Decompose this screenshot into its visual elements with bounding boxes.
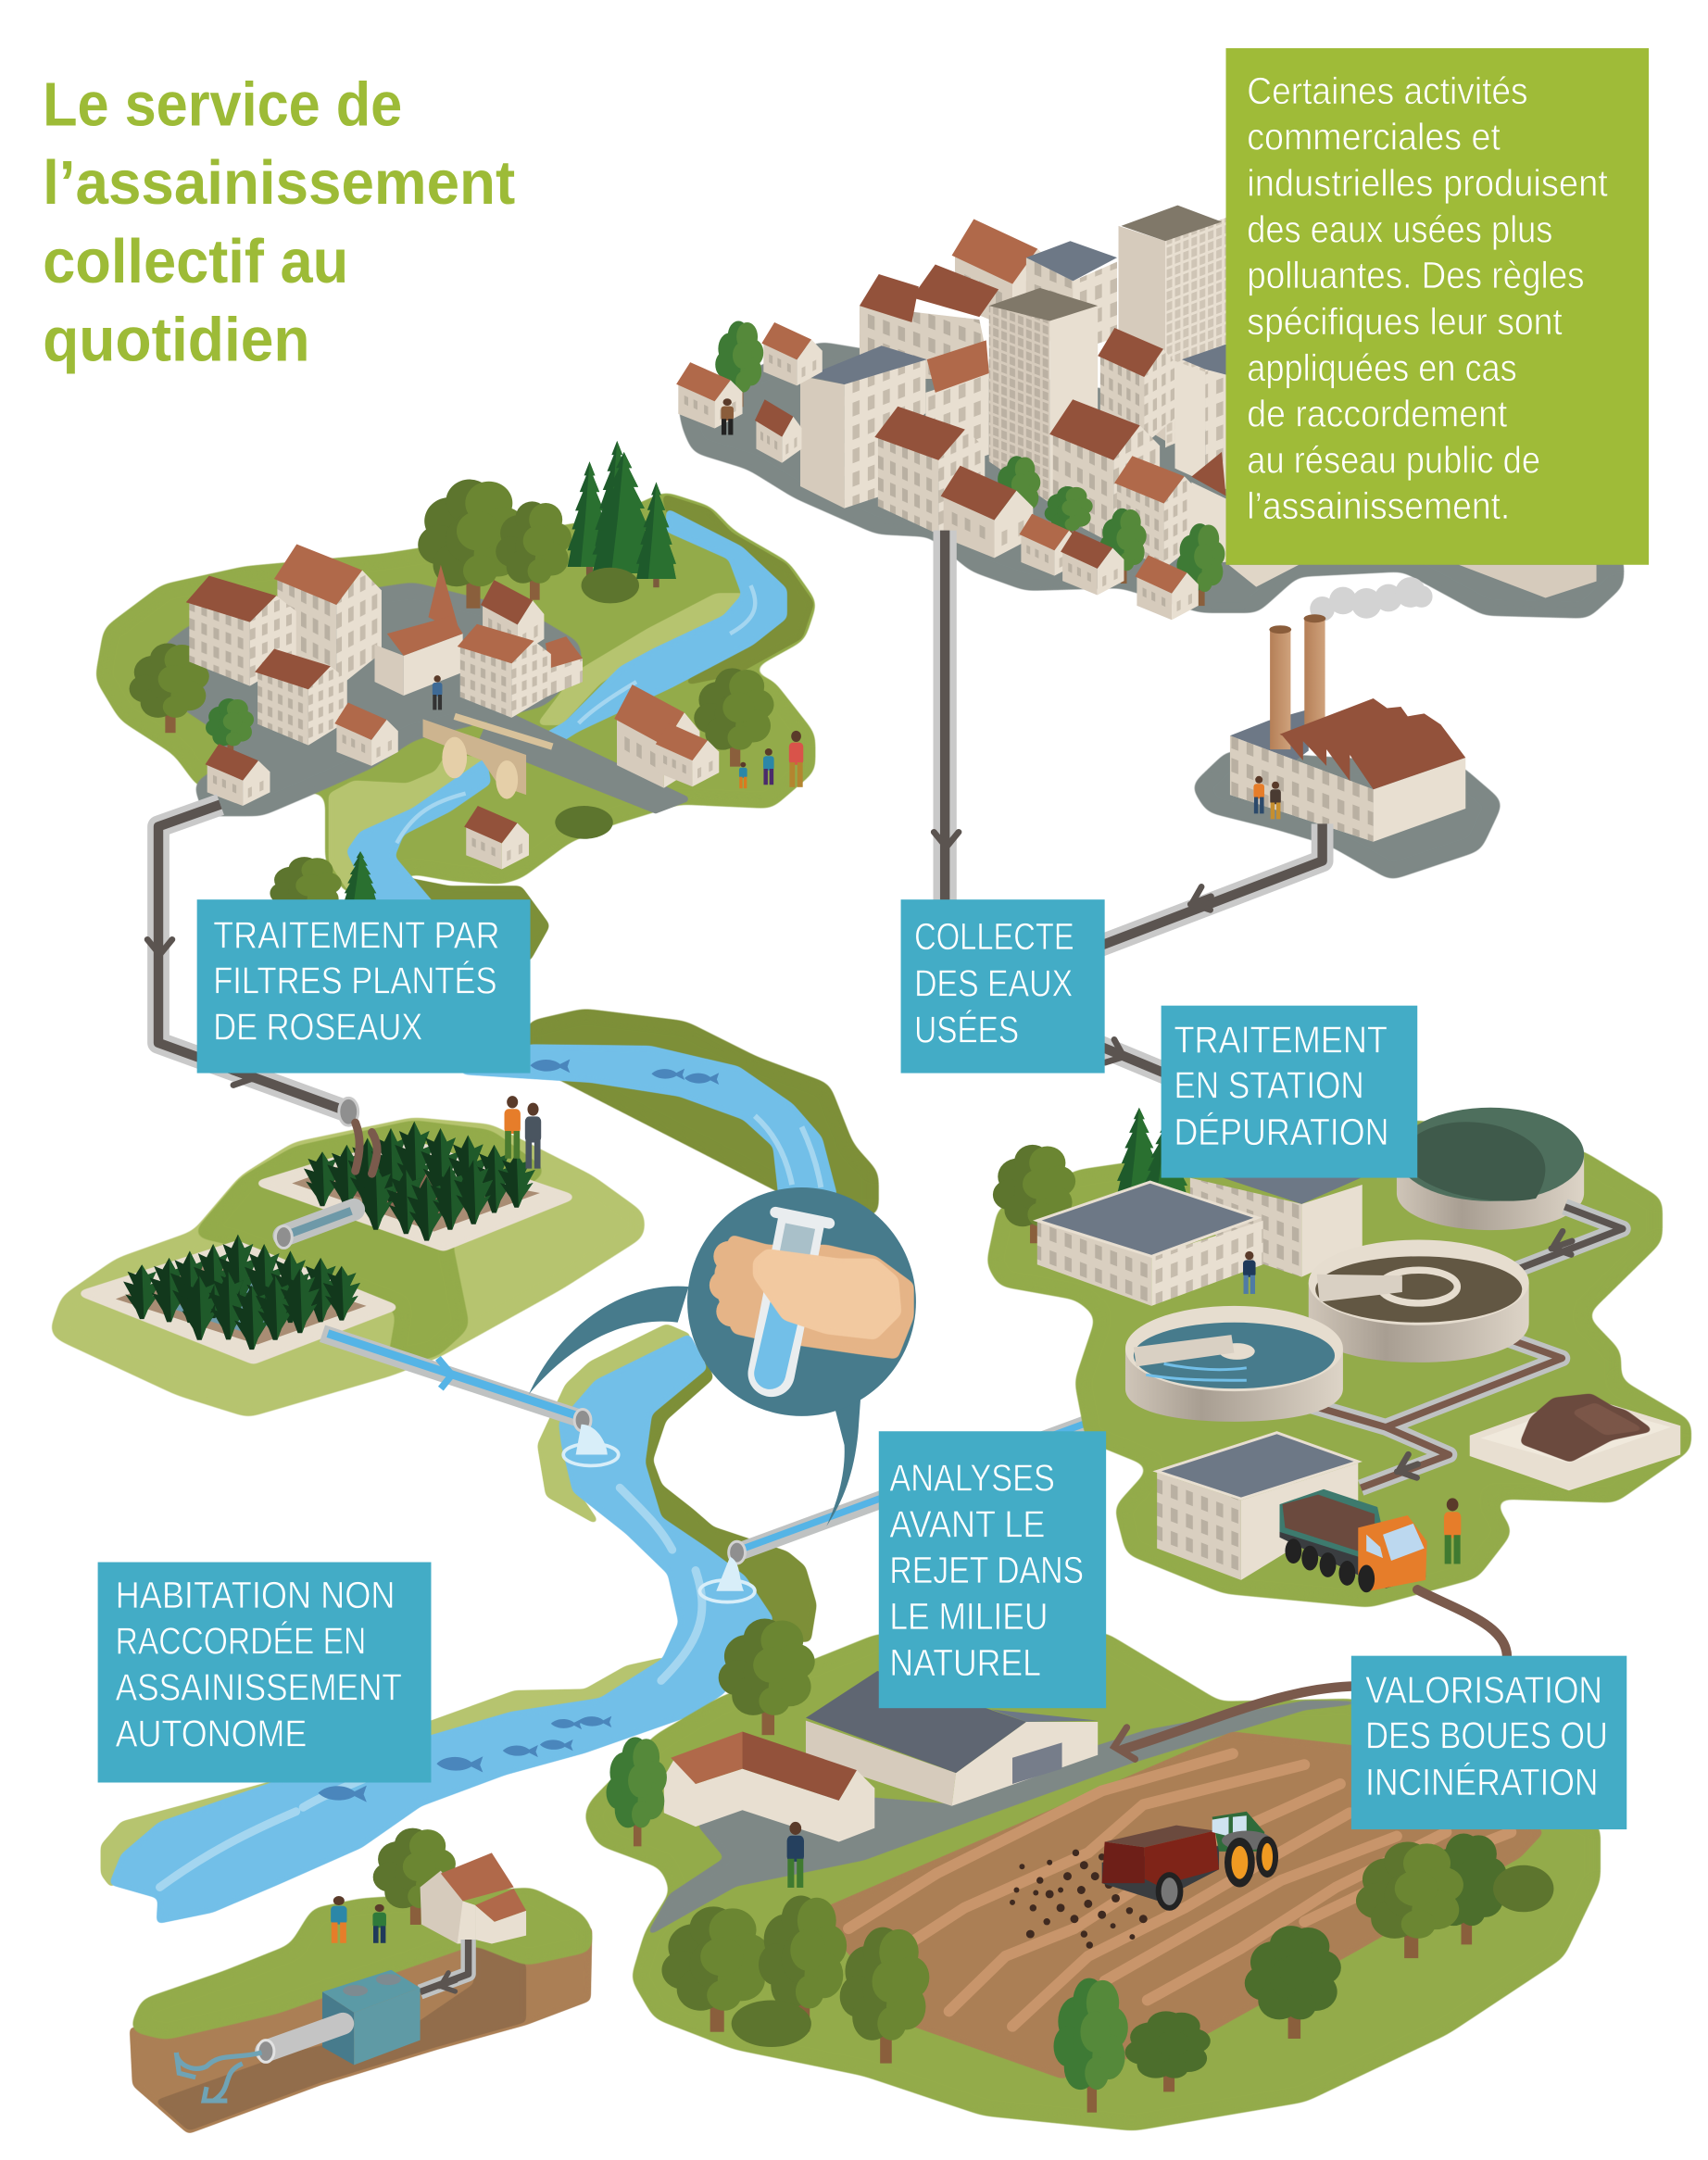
worker xyxy=(1444,1498,1461,1563)
label: reed bed treatment: TRAITEMENT PAR xyxy=(213,914,500,957)
callout: industrial wastewater: industrielles produisent xyxy=(1247,161,1608,204)
water outfall xyxy=(699,1557,755,1602)
furrows xyxy=(848,1753,1511,2027)
label: on-site sanitation: AUTONOME xyxy=(116,1712,307,1754)
river: lower stretch with banks xyxy=(104,1326,814,1922)
lower bed xyxy=(82,1244,394,1361)
label: treatment plant: TRAITEMENT xyxy=(1174,1019,1388,1061)
illustration: farm and field xyxy=(588,1619,1597,2127)
large barn xyxy=(806,1671,1098,1806)
pipe: factory to collection xyxy=(1095,823,1323,948)
children xyxy=(331,1896,386,1943)
septic tank xyxy=(322,1970,421,2065)
smoke xyxy=(1310,577,1433,622)
callout: industrial wastewater: polluantes. Des règles xyxy=(1247,254,1585,296)
river: upper stretch xyxy=(531,511,785,751)
label: analysis before discharge: NATUREL xyxy=(889,1641,1041,1684)
clarifier with sludge xyxy=(1309,1240,1529,1363)
farmhouse xyxy=(664,1731,874,1841)
fish xyxy=(531,1060,719,1085)
title xyxy=(43,69,515,375)
title: l’assainissement xyxy=(43,148,515,218)
label: analysis before discharge xyxy=(879,1431,1106,1708)
pipe: station discharge to river xyxy=(729,1399,1157,1563)
clarifier with clean water xyxy=(1125,1306,1343,1422)
pipe: village to reed beds xyxy=(147,805,358,1125)
pipe: city to collection xyxy=(934,531,959,910)
callout: industrial wastewater: spécifiques leur sont xyxy=(1247,300,1563,343)
access road xyxy=(650,1702,1354,1933)
river: middle stretch with banks xyxy=(460,1012,874,1212)
label: analysis before discharge: LE MILIEU xyxy=(889,1595,1048,1638)
label: sludge valorisation: DES BOUES OU xyxy=(1365,1714,1608,1757)
label: treatment plant xyxy=(1162,1006,1417,1178)
reeds: upper bed xyxy=(304,1122,535,1241)
hand back xyxy=(710,1238,911,1355)
label: reed bed treatment: DE ROSEAUX xyxy=(213,1005,422,1048)
illustration: reed bed filters xyxy=(54,1096,641,1413)
callout: industrial wastewater: appliquées en cas xyxy=(1247,346,1517,389)
arrow: sludge to valorisation xyxy=(1114,1589,1507,1759)
tower centre xyxy=(989,288,1098,503)
label: analysis before discharge: REJET DANS xyxy=(889,1549,1084,1591)
label: reed bed treatment xyxy=(197,899,531,1074)
label: treatment plant: DÉPURATION xyxy=(1174,1111,1388,1153)
water outfall xyxy=(563,1425,619,1465)
fingers xyxy=(756,1252,898,1337)
tower back right xyxy=(1119,206,1226,447)
soil block xyxy=(132,1928,589,2131)
back building xyxy=(1190,1175,1363,1277)
tanker truck xyxy=(1280,1489,1427,1592)
river: below bridge xyxy=(348,760,489,910)
fish xyxy=(319,1716,611,1802)
analysis bubble: hand holding a test tube xyxy=(529,1187,916,1526)
callout: industrial wastewater xyxy=(1226,48,1649,565)
test tube xyxy=(770,1212,829,1374)
outlet pipe xyxy=(257,2024,343,2062)
label: reed bed treatment: FILTRES PLANTÉS xyxy=(213,960,497,1002)
sludge pour xyxy=(356,1123,377,1174)
illustration: treatment plant xyxy=(990,1108,1688,1603)
callout: industrial wastewater: de raccordement xyxy=(1247,393,1508,435)
pipe between beds xyxy=(275,1210,354,1248)
pipes on site xyxy=(1310,1207,1623,1488)
label: wastewater collection: COLLECTE xyxy=(914,915,1074,958)
farmer xyxy=(787,1822,804,1888)
illustration: city with housing xyxy=(676,206,1620,620)
tractor and spreader xyxy=(1102,1812,1278,1911)
label: treatment plant: EN STATION xyxy=(1174,1064,1364,1107)
label: wastewater collection xyxy=(901,899,1105,1074)
trees xyxy=(607,1619,1553,2113)
title: collectif au xyxy=(43,227,348,296)
pipe: collection to station xyxy=(1095,1037,1185,1081)
label: wastewater collection: DES EAUX xyxy=(914,962,1073,1005)
label: wastewater collection: USÉES xyxy=(914,1008,1019,1050)
label: on-site sanitation: HABITATION NON xyxy=(116,1574,395,1616)
sludge spread on the field xyxy=(1010,1850,1148,1949)
pipe: reed beds to river xyxy=(322,1334,591,1431)
label: on-site sanitation: ASSAINISSEMENT xyxy=(116,1666,402,1709)
block with flat roof xyxy=(800,345,927,509)
bridge xyxy=(423,716,552,799)
callout: industrial wastewater: l’assainissement. xyxy=(1247,484,1510,527)
illustration: house with on-site sanitation xyxy=(132,1828,589,2131)
callout: industrial wastewater: commerciales et xyxy=(1247,116,1501,158)
illustration: factory xyxy=(1196,577,1499,876)
inlet pipe xyxy=(421,1940,469,1996)
village houses xyxy=(186,544,719,869)
walkers xyxy=(739,731,803,788)
title: quotidien xyxy=(43,306,310,375)
technicians xyxy=(505,1096,541,1169)
digester xyxy=(1397,1108,1584,1230)
label: analysis before discharge: AVANT LE xyxy=(889,1502,1045,1545)
callout: industrial wastewater: des eaux usées plus xyxy=(1247,207,1552,250)
reeds: lower bed xyxy=(123,1235,360,1350)
sludge building xyxy=(1157,1433,1358,1580)
label: on-site sanitation: RACCORDÉE EN xyxy=(116,1620,366,1663)
sludge bin xyxy=(1470,1396,1680,1490)
label: sludge valorisation: VALORISATION xyxy=(1365,1669,1602,1712)
callout: industrial wastewater: au réseau public de xyxy=(1247,438,1540,481)
low building xyxy=(1037,1182,1263,1306)
illustration: village land xyxy=(101,441,811,964)
label: on-site sanitation xyxy=(98,1563,431,1782)
label: sludge valorisation: INCINÉRATION xyxy=(1365,1761,1598,1803)
road network xyxy=(165,585,684,812)
callout: industrial wastewater: Certaines activités xyxy=(1247,69,1528,112)
label: analysis before discharge: ANALYSES xyxy=(889,1456,1055,1499)
ploughed field xyxy=(823,1736,1538,2075)
label: sludge valorisation xyxy=(1351,1656,1626,1829)
upper bed xyxy=(260,1143,571,1248)
forest and trees xyxy=(130,441,774,928)
infiltration arrows xyxy=(176,2053,262,2101)
title: Le service de xyxy=(43,69,402,139)
